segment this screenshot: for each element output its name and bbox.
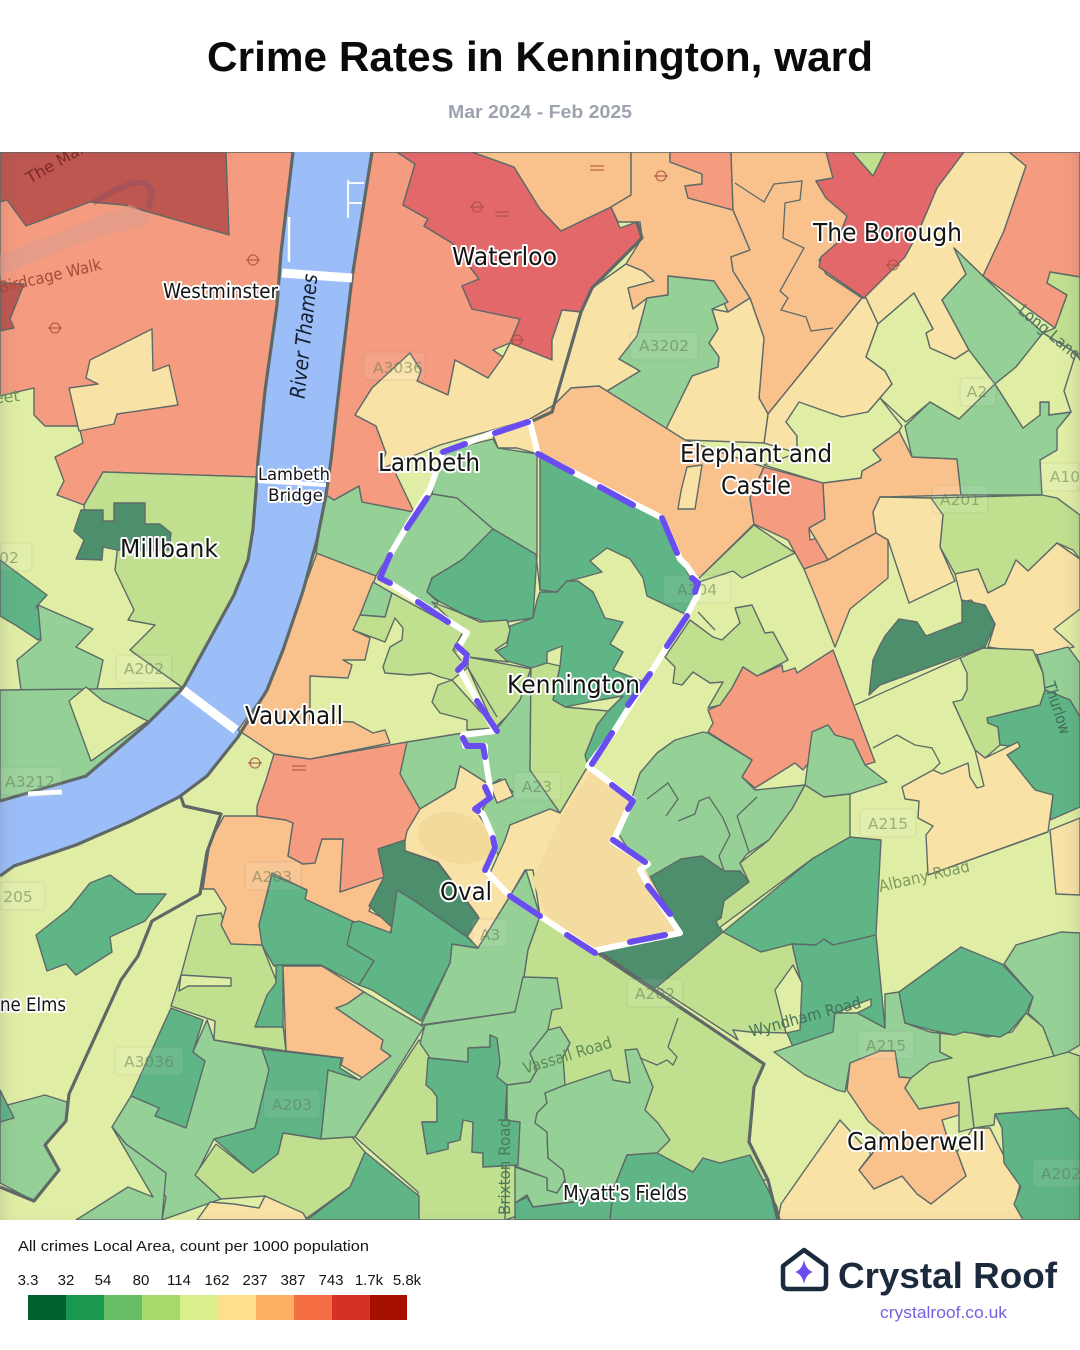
brand url: crystalroof.co.uk — [880, 1304, 1008, 1322]
road shields: A203 — [272, 1096, 312, 1114]
place labels: Waterloo — [452, 242, 557, 271]
place labels: Vauxhall — [245, 701, 343, 730]
borough boundary lines — [0, 152, 778, 1220]
legend values: 162 — [204, 1272, 230, 1289]
road shields: A202 — [1041, 1165, 1080, 1183]
legend values: 237 — [242, 1272, 268, 1289]
road shields: A2 — [967, 383, 987, 401]
place labels: Lambeth — [378, 448, 480, 477]
legend values: 3.3 — [18, 1272, 38, 1289]
road shields: A202 — [124, 660, 164, 678]
place labels: Camberwell — [847, 1127, 985, 1156]
place labels: The Borough — [812, 218, 962, 247]
park area inside ward — [532, 870, 658, 893]
legend values — [18, 1272, 422, 1289]
place labels: Kennington — [507, 670, 640, 699]
station icons — [48, 166, 900, 770]
place labels: Bridge — [268, 486, 323, 506]
legend colour scale — [28, 1295, 407, 1320]
legend values: 114 — [167, 1272, 191, 1289]
place labels: Castle — [721, 471, 791, 500]
subtitle: date range: Mar 2024 - Feb 2025 — [448, 101, 632, 122]
road shields: A304 — [677, 581, 717, 599]
internal boundary lines — [468, 181, 1047, 1065]
road shields: A215 — [868, 815, 908, 833]
road names: Wyndham Road — [747, 993, 863, 1041]
road names: Brixton Road — [495, 1118, 514, 1215]
place labels: Elephant and — [680, 439, 832, 468]
legend values: 80 — [133, 1272, 149, 1289]
ward boundary: kennington — [380, 422, 698, 953]
road names: Vassall Road — [521, 1033, 614, 1078]
place labels — [0, 218, 985, 1205]
title: Crime Rates in Kennington, ward — [207, 33, 873, 80]
legend values: 387 — [280, 1272, 306, 1289]
road shields: A215 — [866, 1037, 906, 1055]
road shields: A3036 — [124, 1053, 174, 1071]
st james's park and lake — [0, 182, 152, 275]
place labels: River Thames — [286, 273, 323, 400]
road names: The Mall — [22, 137, 90, 188]
legend values: 5.8k — [393, 1272, 422, 1289]
road shields: A3 — [480, 926, 500, 944]
legend values: 54 — [95, 1272, 111, 1289]
road shields: A3036 — [373, 359, 423, 377]
river thames — [0, 152, 372, 876]
place labels: ne Elms — [0, 994, 66, 1016]
road names: Thurlow — [1040, 679, 1075, 737]
brand name: Crystal Roof — [838, 1255, 1058, 1296]
place labels: Lambeth — [258, 465, 330, 485]
road shields: A3212 — [5, 773, 55, 791]
road shields: 205 — [3, 888, 33, 906]
oval cricket ground — [418, 812, 492, 864]
place labels: Millbank — [120, 534, 218, 563]
legend values: 1.7k — [355, 1272, 384, 1289]
place labels: Oval — [440, 877, 492, 906]
legend title: All crimes Local Area, count per 1000 population — [18, 1238, 369, 1255]
crime rate cells — [0, 152, 1080, 1220]
place labels: Westminster — [163, 279, 279, 303]
road shields: A201 — [940, 491, 980, 509]
icon: house with star — [783, 1250, 826, 1289]
road shields: A23 — [522, 778, 552, 796]
legend values: 32 — [58, 1272, 74, 1289]
place labels: Myatt's Fields — [563, 1181, 687, 1205]
road shields — [0, 332, 1080, 1187]
logo: crystal roof — [783, 1250, 1058, 1322]
legend values: 743 — [318, 1272, 344, 1289]
bridges — [28, 180, 364, 794]
road names — [0, 137, 1080, 1215]
road names: Albany Road — [877, 856, 972, 896]
road shields: A3202 — [639, 337, 689, 355]
legend — [18, 1238, 422, 1320]
road shields: A10 — [1050, 468, 1080, 486]
road names: Birdcage Walk — [0, 255, 104, 297]
road shields: A203 — [252, 868, 292, 886]
road shields: A202 — [635, 985, 675, 1003]
